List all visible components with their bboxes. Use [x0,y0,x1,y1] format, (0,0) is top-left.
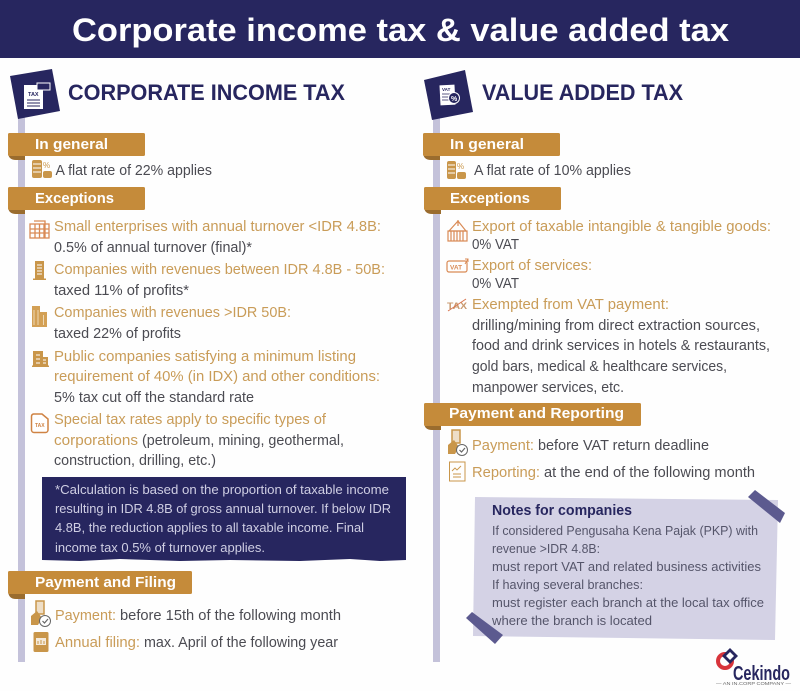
panel: calculation footnote [42,477,406,561]
icon: mid-size building [33,261,46,280]
text: exempted from VAT: food and drink services in hotels & restaurants, [472,338,770,354]
ribbon: payment and reporting: Payment and Reporting [449,405,624,422]
panel: calculation footnote: *Calculation is based on the proportion of taxable income [55,482,389,497]
ribbon: exceptions (VAT): Exceptions [450,190,530,207]
text: revenues over 50B: Companies with revenues >IDR 50B: [54,305,291,321]
text: revenues over 50B [54,305,291,342]
text: public companies: requirement of 40% (in IDX) and other conditions: [54,369,380,385]
text: flat rate CIT: A flat rate of 22% applies [56,163,212,179]
icon: small enterprise building [30,221,49,238]
text: special tax rates: (petroleum, mining, geothermal, [142,433,344,449]
icon: annual filing book [34,632,48,652]
logo: Cekindo [716,648,792,686]
text: notes body: must report VAT and related business activities [492,559,761,574]
icon: payment hand (CIT) [31,601,50,626]
tape: bottom left [466,612,503,644]
text: payment VAT: before VAT return deadline [538,438,709,454]
icon: corporate tax document: TAX [28,92,39,98]
text: payment CIT: Payment: [55,608,116,624]
text: revenues between: taxed 11% of profits* [54,283,189,299]
text: exempted from VAT: Exempted from VAT payment: [472,297,669,313]
ribbon: in general (VAT) [423,133,560,160]
ribbon: payment and filing [8,571,192,599]
text: payment CIT: before 15th of the following month [120,608,341,624]
text: reporting: at the end of the following month [544,465,755,481]
text: exempted from VAT: drilling/mining from direct extraction sources, [472,318,760,334]
text: export of services: Export of services: [472,258,592,274]
text: small enterprises: Small enterprises with annual turnover <IDR 4.8B: [54,219,381,235]
text: notes body: If having several branches: [492,577,643,592]
text: special tax rates: corporations [54,433,138,449]
text: special tax rates: Special tax rates apply to specific types of [54,412,327,428]
icon: coins (CIT): % [43,161,50,170]
text: exempted from VAT: gold bars, medical & healthcare services, [472,359,727,375]
panel: calculation footnote: resulting in IDR 4.8B of gross annual turnover. If below IDR [55,501,391,516]
ribbon: exceptions (CIT) [8,187,145,214]
icon: tax file [31,414,48,432]
text: revenues between: Companies with revenues between IDR 4.8B - 50B: [54,262,385,278]
text: public companies: Public companies satisfying a minimum listing [54,349,356,365]
ribbon: exceptions (VAT) [424,187,561,214]
icon: VAT document: VAT [442,87,451,92]
text: annual filing: max. April of the following year [144,635,338,651]
icon: reporting chart [450,462,465,481]
title banner: Corporate income tax & value added tax [72,12,729,48]
icon: tax file: TAX [35,423,45,429]
ribbon: in general (CIT) [8,133,145,160]
text: exempted from VAT: manpower services, etc. [472,380,624,396]
text: public companies: 5% tax cut off the standard rate [54,390,254,406]
text: notes body: revenue >IDR 4.8B: [492,541,600,556]
text: notes body: If considered Pengusaha Kena Pajak (PKP) with [492,523,758,538]
panel: calculation footnote: 4.8B, the reduction applies to all taxable income. Final [55,520,364,535]
text: export of services [472,258,592,292]
text: revenues between [54,262,385,299]
text: notes body: where the branch is located [491,613,652,628]
icon: coins (VAT) [447,161,466,179]
panel: calculation footnote: income tax 0.5% of turnover applies. [55,540,265,555]
text: revenues over 50B: taxed 22% of profits [54,326,181,342]
icon: coins (VAT): % [457,162,464,171]
text: notes body: must register each branch at the local tax office [492,595,764,610]
ribbon: payment and filing: Payment and Filing [35,574,176,591]
text: exempted from VAT [472,297,770,396]
tape: top right [748,490,785,523]
logo: Cekindo: — AN IN.CORP COMPANY — [716,681,792,686]
icon: corporate tax document [10,69,60,119]
heading: notes for companies: Notes for companies [492,503,632,519]
text: small enterprises [54,219,381,256]
ribbon: exceptions (CIT): Exceptions [35,190,114,207]
text: flat rate VAT: A flat rate of 10% applies [474,163,631,179]
icon: export container [448,220,467,241]
text: export of goods [472,219,771,253]
text: small enterprises: 0.5% of annual turnover (final)* [54,240,252,256]
text: export of goods: 0% VAT [472,237,519,253]
icon: VAT document [424,70,473,120]
timeline bar: value added tax [433,112,440,662]
text: reporting: Reporting: [472,465,540,481]
text: notes body [491,523,764,628]
icon: VAT document: % [451,96,458,103]
title banner [0,0,800,58]
icon: large buildings [32,306,47,327]
ribbon: payment and reporting [424,403,641,430]
text: special tax rates: construction, drilling, etc.) [54,453,216,469]
panel: notes for companies [473,497,778,640]
text: export of goods: Export of taxable intangible & tangible goods: [472,219,771,235]
text: special tax rates [54,412,344,469]
icon: VAT export [447,259,468,272]
icon: public company building [32,351,49,367]
text: public companies [54,349,380,406]
timeline bar: corporate income tax [18,112,25,662]
ribbon: in general (VAT): In general [450,136,524,153]
ribbon: in general (CIT): In general [35,136,108,153]
icon: VAT export: VAT [450,264,462,272]
text: annual filing [55,635,338,651]
text: payment VAT: Payment: [472,438,534,454]
icon: payment hand (VAT) [448,430,468,456]
icon: crossed-out tax: TAX [447,301,468,312]
heading: value added tax: VALUE ADDED TAX [482,80,683,105]
icon: coins (CIT) [32,160,52,178]
text: annual filing: Annual filing: [55,635,140,651]
heading: corporate income tax: CORPORATE INCOME TAX [68,80,345,105]
text: export of services: 0% VAT [472,276,519,292]
